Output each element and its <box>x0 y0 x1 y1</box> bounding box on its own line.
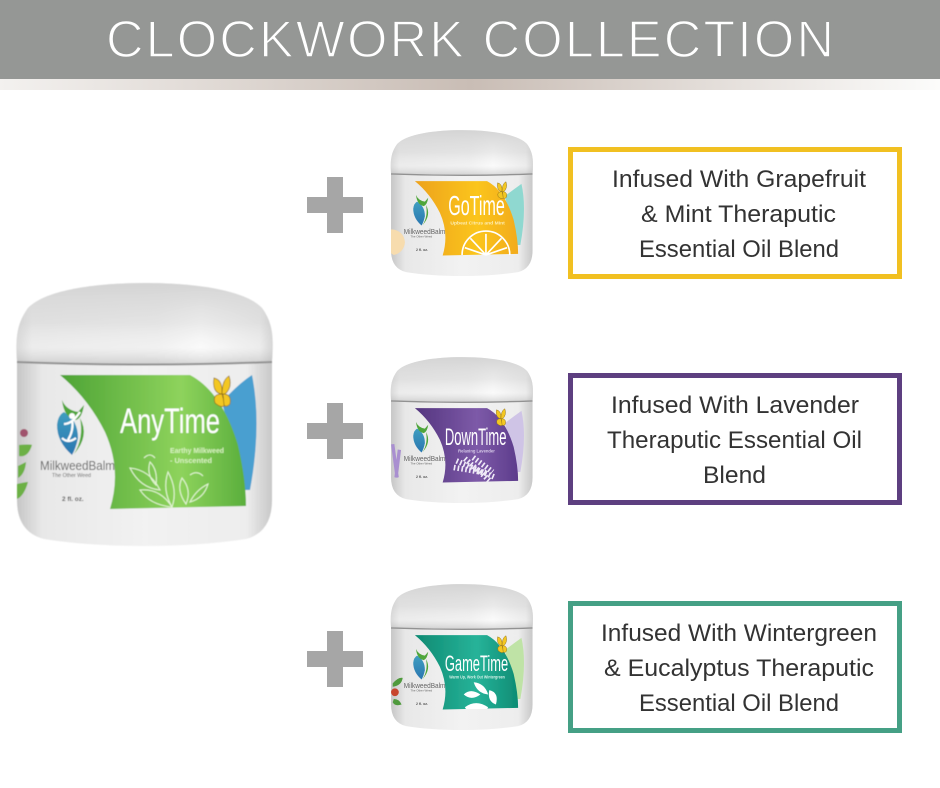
tagline: The Other Weed <box>52 473 91 479</box>
text box: DownTime: Infused With Lavender <box>611 392 859 419</box>
product name: AnyTime <box>120 402 220 441</box>
logo <box>413 422 428 453</box>
product name: GameTime <box>445 651 508 676</box>
text box: GoTime: Essential Oil Blend <box>639 236 839 263</box>
logo <box>413 649 428 680</box>
citrus slice art <box>462 231 510 255</box>
text box: DownTime: Theraputic Essential Oil <box>607 427 862 454</box>
wintergreen leaf art <box>464 682 497 709</box>
small jar: GoTime <box>391 130 533 276</box>
text box: DownTime: Blend <box>703 462 766 489</box>
brand name: MilkweedBalm <box>404 683 446 690</box>
product name: GoTime <box>448 190 505 221</box>
logo <box>57 400 84 455</box>
size: 2 fl. oz. <box>416 475 428 479</box>
size: 2 fl. oz. <box>62 496 84 503</box>
product subtitle: Relaxing Lavender <box>458 449 495 454</box>
text box: GameTime: Essential Oil Blend <box>639 690 839 717</box>
milkweed line art <box>130 455 208 507</box>
brand name: MilkweedBalm <box>404 456 446 463</box>
butterfly <box>214 376 230 407</box>
tagline: The Other Weed <box>410 689 432 693</box>
title banner <box>0 0 940 90</box>
title: CLOCKWORK COLLECTION <box>106 11 834 69</box>
text box: GoTime: & Mint Theraputic <box>641 201 836 228</box>
brand name: MilkweedBalm <box>40 459 115 473</box>
herb illustration <box>17 429 32 499</box>
plus sign 1 <box>307 177 363 233</box>
small jar: DownTime <box>391 357 533 503</box>
small jar: GameTime <box>391 584 533 730</box>
lavender flower art <box>454 458 495 481</box>
lavender sprig left <box>393 444 399 478</box>
large jar: AnyTime: - Unscented <box>170 456 212 465</box>
text box: GameTime: & Eucalyptus Theraputic <box>604 655 874 682</box>
text box: GoTime: Infused With Grapefruit <box>612 166 866 193</box>
product subtitle: Earthy Milkweed <box>170 446 224 455</box>
large jar: AnyTime <box>16 283 273 546</box>
logo <box>413 195 428 226</box>
butterfly <box>497 636 507 653</box>
plus sign 3 <box>307 631 363 687</box>
butterfly <box>497 182 507 199</box>
butterfly <box>496 409 506 426</box>
brand name: MilkweedBalm <box>404 229 446 236</box>
plus sign 2 <box>307 403 363 459</box>
text box: GameTime: Infused With Wintergreen <box>601 620 877 647</box>
size: 2 fl. oz. <box>416 702 428 706</box>
text box: GoTime <box>570 150 900 276</box>
product name: DownTime <box>445 424 506 451</box>
size: 2 fl. oz. <box>416 248 428 252</box>
text box: DownTime <box>570 376 900 502</box>
wintergreen sprig left <box>391 678 403 705</box>
tagline: The Other Weed <box>410 235 432 239</box>
text box: GameTime <box>570 604 900 730</box>
product subtitle: Upbeat Citrus and Mint <box>450 220 505 226</box>
product subtitle: Warm Up, Work Out Wintergreen <box>449 674 505 679</box>
citrus slice left <box>391 229 405 255</box>
tagline: The Other Weed <box>410 462 432 466</box>
